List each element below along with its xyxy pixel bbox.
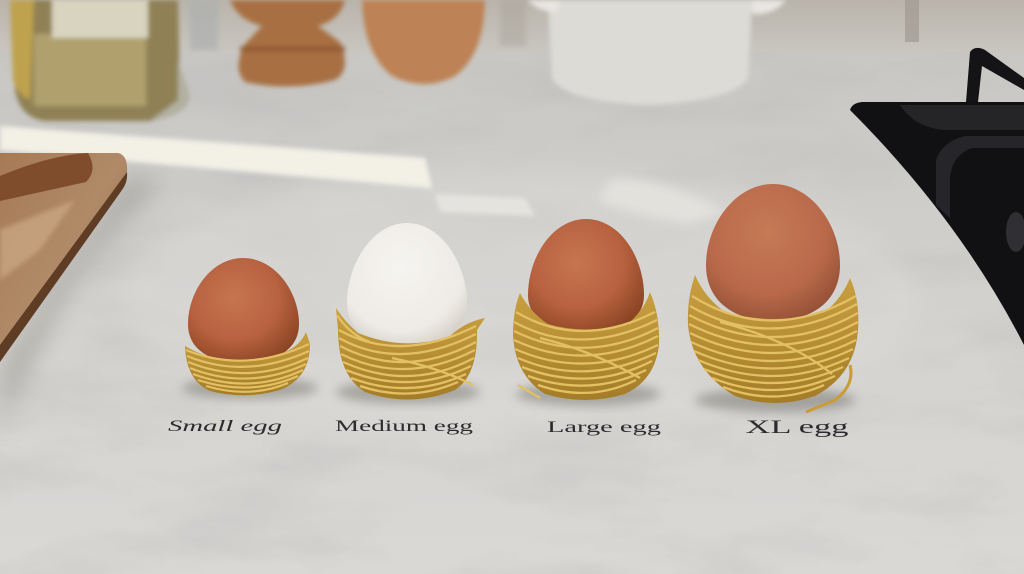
egg: small: [188, 258, 299, 363]
jar: [10, 0, 190, 121]
egg: large: [528, 219, 644, 333]
medium egg with nest: [336, 223, 485, 404]
nest: small: [185, 332, 310, 395]
egg: medium white: [347, 223, 467, 347]
wooden stacked object: [230, 0, 345, 87]
sunlight streaks: [0, 126, 725, 224]
XL egg with nest: [688, 184, 858, 412]
cutting board: [0, 153, 127, 362]
small egg with nest: [182, 258, 318, 399]
nest: medium: [336, 308, 485, 400]
white pot: [528, 0, 786, 105]
egg: XL: [706, 184, 840, 321]
label: XL egg: XL egg: [746, 417, 849, 438]
terracotta bowl: [362, 0, 485, 84]
label: large egg: Large egg: [547, 419, 661, 436]
large egg with nest: [513, 219, 660, 406]
gas stove: [850, 48, 1024, 345]
back wall: [0, 0, 1024, 52]
nest: large: [513, 292, 659, 400]
nest: XL: [688, 275, 858, 412]
label: medium egg: Medium egg: [335, 418, 473, 435]
label: small egg: Small egg: [168, 418, 282, 435]
